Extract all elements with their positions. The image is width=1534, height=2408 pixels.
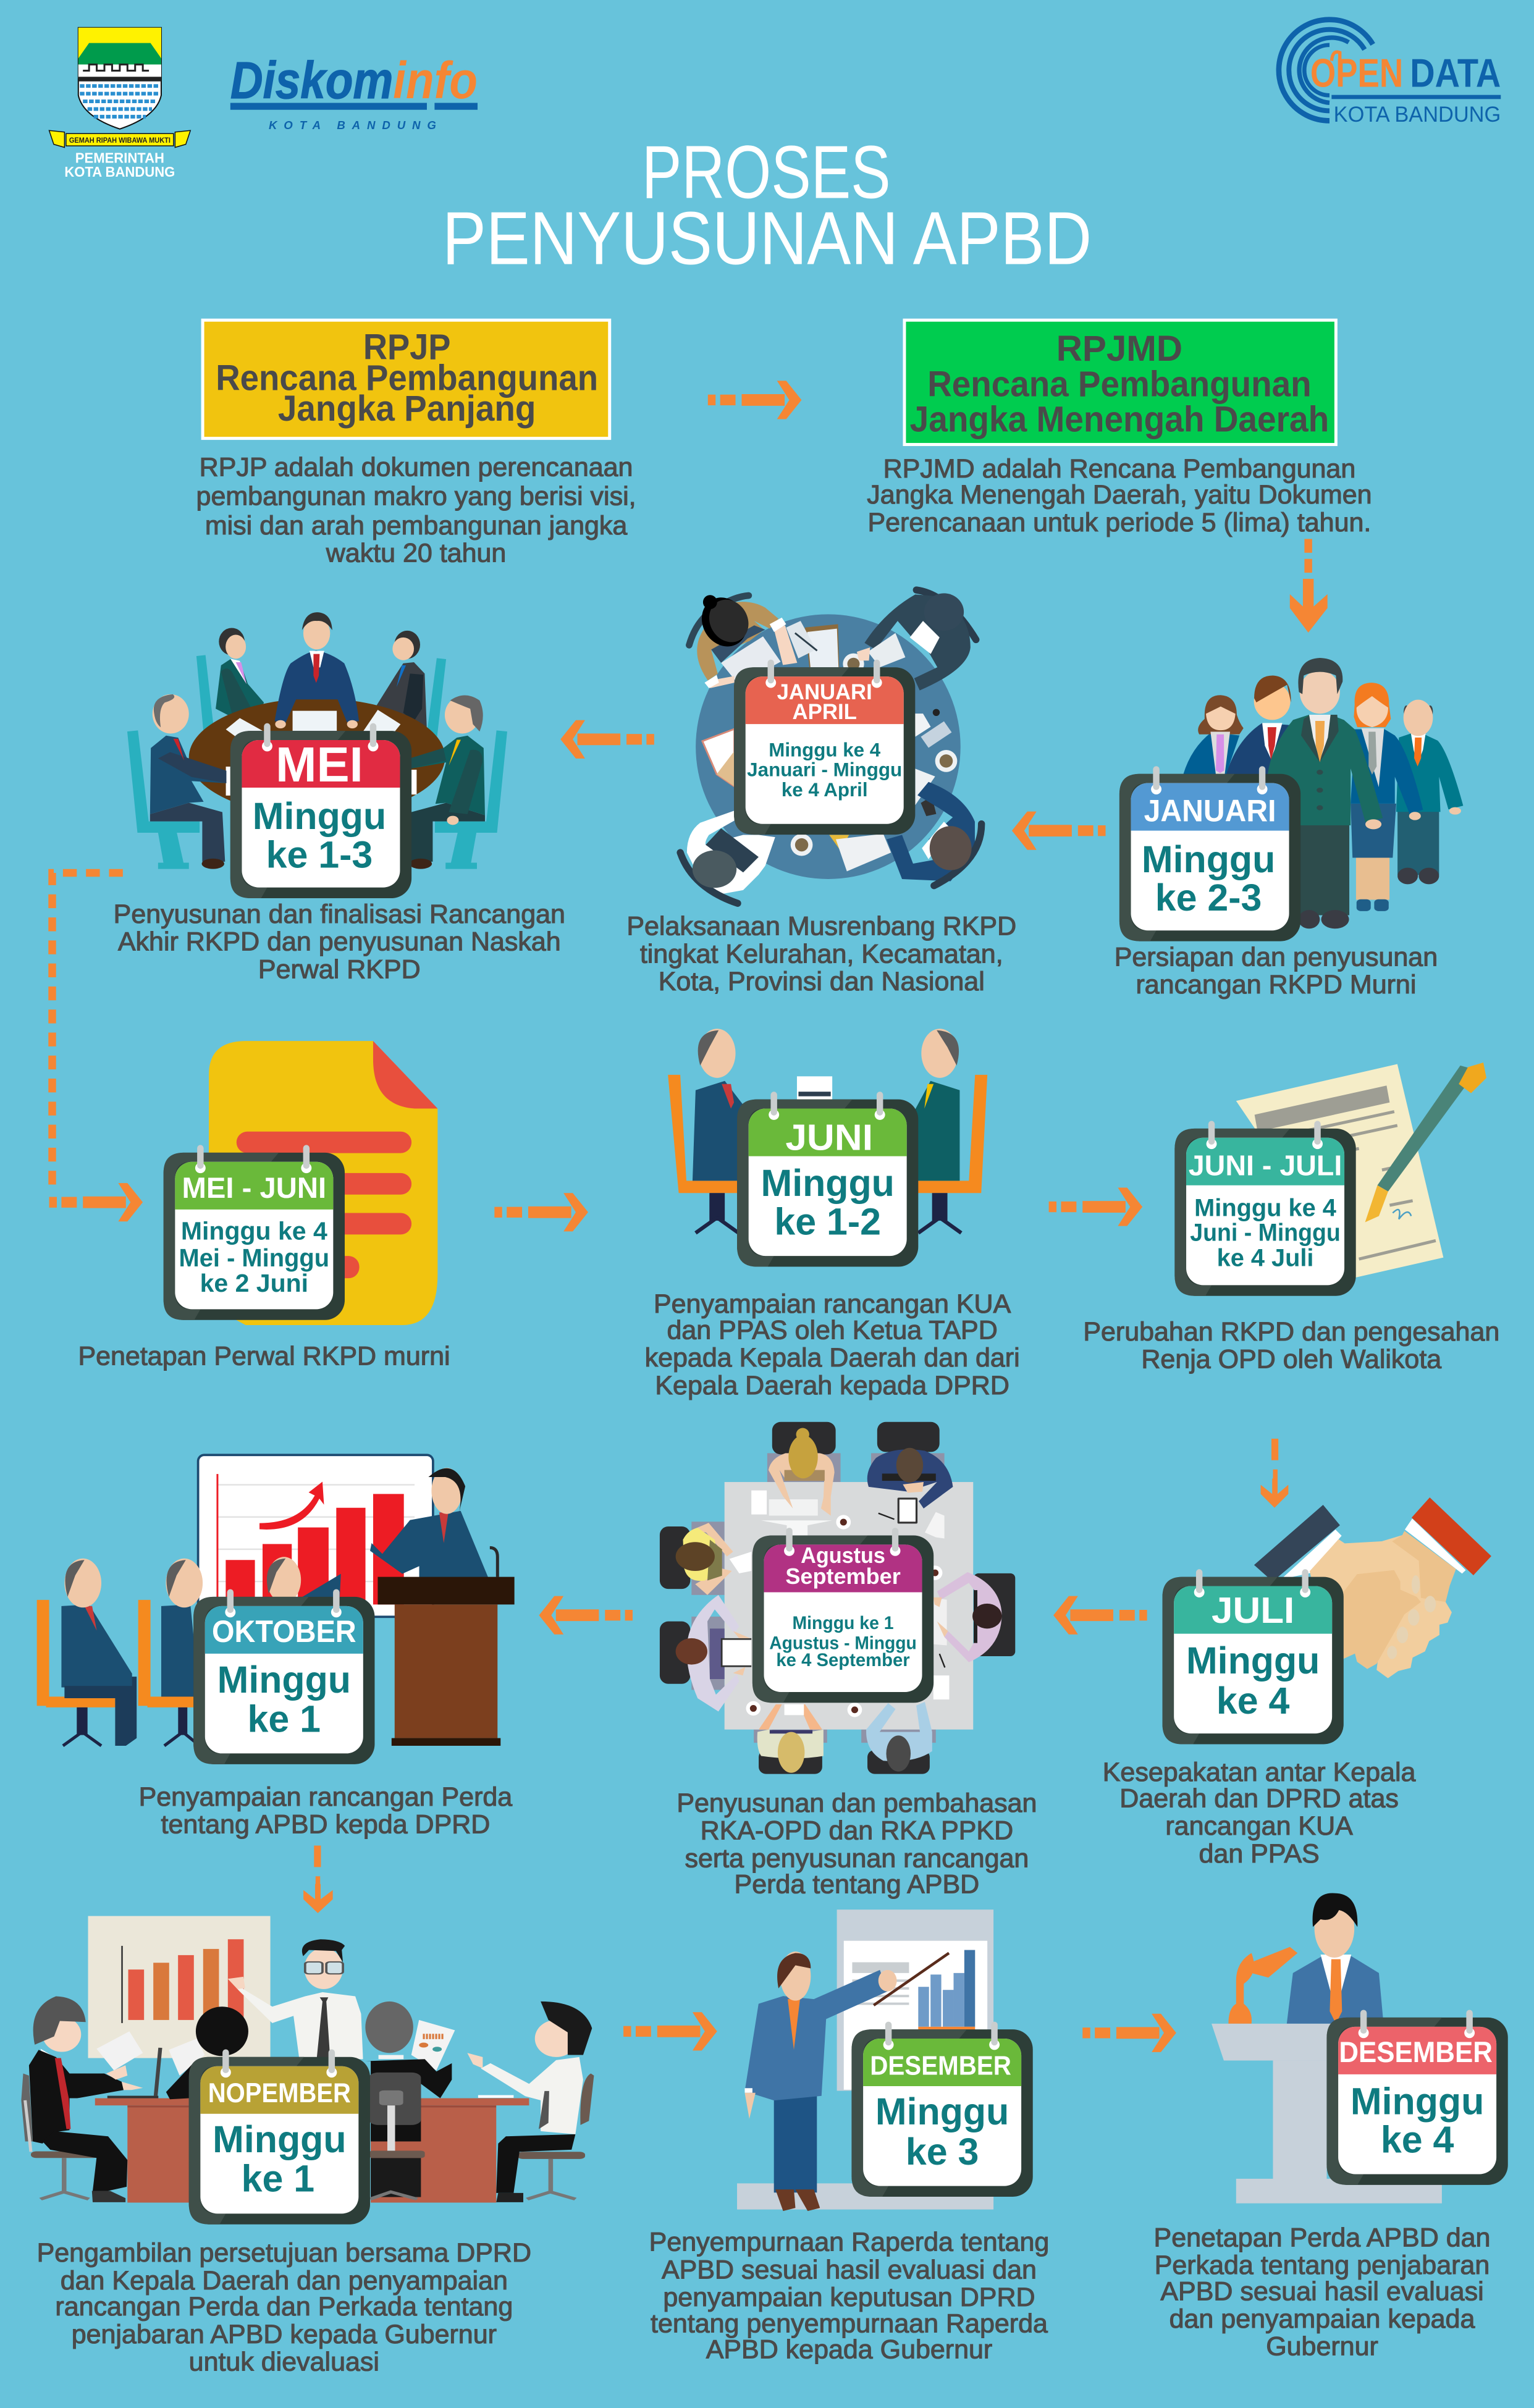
calendar: Juli: JULI: [1212, 1589, 1294, 1631]
text: Nopember description: penjabaran APBD kepada Gubernur: [72, 2320, 497, 2349]
calendar: Desember hijau: [851, 2022, 1033, 2197]
arrow: Juni to Juni-Juli: [1049, 1188, 1142, 1226]
logo: Diskominfo: info: [393, 51, 478, 109]
calendar: Juni-Juli: JUNI - JULI: [1189, 1150, 1342, 1182]
text: RPJP description: waktu 20 tahun: [326, 539, 506, 568]
text: Agustus-September description: [676, 1788, 1037, 1900]
text: RPJP description: [196, 453, 636, 568]
text: Januari-April description: Pelaksanaan Musrenbang RKPD: [626, 912, 1016, 941]
text: Mei description: Penyusunan dan finalisasi Rancangan: [114, 899, 565, 929]
text: Januari description: [1115, 942, 1438, 1000]
text: Oktober description: tentang APBD kepda DPRD: [161, 1810, 490, 1840]
text: Desember hijau description: penyampaian keputusan DPRD: [663, 2283, 1035, 2312]
text: RPJMD description: [867, 454, 1372, 537]
calendar: Januari: ke 2-3: [1155, 877, 1262, 919]
text: Juni description: Penyampaian rancangan KUA: [654, 1289, 1011, 1319]
logo: Pemerintah Kota Bandung: [49, 28, 190, 180]
calendar: Januari-April: ke 4 April: [782, 779, 868, 801]
text: Agustus-September description: serta penyusunan rancangan: [685, 1843, 1029, 1873]
panel: RPJMD: Jangka Menengah Daerah: [910, 399, 1329, 439]
calendar: Juni: Minggu: [761, 1162, 895, 1204]
text: Januari description: rancangan RKPD Murni: [1136, 970, 1416, 1000]
text: Juni description: dan PPAS oleh Ketua TAPD: [667, 1315, 998, 1345]
calendar: Januari-April: APRIL: [793, 701, 857, 724]
text: Mei description: Perwal RKPD: [258, 954, 421, 984]
panel: RPJMD: RPJMD: [1056, 329, 1182, 369]
arrow: RPJMD down to Januari: [1290, 539, 1328, 633]
calendar: Nopember: Minggu: [213, 2118, 347, 2160]
calendar: Juni: JUNI: [785, 1117, 873, 1158]
panel: RPJP: Jangka Panjang: [278, 389, 536, 429]
text: Juni-Juli description: Renja OPD oleh Walikota: [1141, 1345, 1441, 1374]
calendar: Desember merah: DESEMBER: [1339, 2036, 1493, 2069]
illustration: document: [209, 1041, 437, 1325]
arrow: Nopember to Desember: [623, 2012, 717, 2050]
text: Desember merah description: [1154, 2223, 1490, 2362]
calendar: Juli: ke 4: [1216, 1680, 1290, 1722]
calendar: Agustus-September: Agustus: [801, 1543, 885, 1568]
arrow: Juni-Juli down to Juli: [1261, 1439, 1288, 1508]
text: Nopember description: untuk dievaluasi: [189, 2347, 379, 2377]
calendar: Desember merah: [1326, 2010, 1508, 2185]
text: RPJP description: RPJP adalah dokumen perencanaan: [200, 453, 633, 482]
logo: Open Data: DATA: [1410, 50, 1501, 95]
arrow: Agustus-September to Oktober: [539, 1596, 633, 1635]
calendar: Mei-Juni: MEI - JUNI: [182, 1172, 326, 1205]
logo: Pemerintah Kota Bandung: KOTA BANDUNG: [64, 164, 175, 180]
panel: RPJP: [203, 320, 610, 439]
illustration: presenter with pointer: [737, 1909, 993, 2211]
text: Agustus-September description: Perda tentang APBD: [735, 1870, 979, 1900]
calendar: Agustus-September: [752, 1528, 933, 1703]
text: Oktober description: [139, 1782, 512, 1840]
text: Juni-Juli description: [1083, 1317, 1499, 1374]
calendar: Desember merah: ke 4: [1381, 2119, 1454, 2161]
arrow: RPJP to RPJMD: [708, 381, 801, 419]
logo: Diskominfo: KOTA BANDUNG: [269, 119, 436, 132]
illustration: two seated men: [668, 1029, 987, 1233]
calendar: Mei-Juni: Mei - Minggu: [179, 1244, 329, 1272]
calendar: Desember hijau: DESEMBER: [870, 2051, 1011, 2081]
calendar: Oktober: OKTOBER: [212, 1614, 356, 1649]
text: Desember merah description: APBD sesuai hasil evaluasi: [1160, 2276, 1484, 2306]
illustration: team of five: [1183, 658, 1463, 928]
calendar: Juni-Juli: Juni - Minggu: [1190, 1219, 1341, 1246]
calendar: Desember hijau: Minggu: [875, 2090, 1009, 2132]
calendar: Januari: Minggu: [1142, 838, 1275, 880]
calendar: Agustus-September: ke 4 September: [776, 1650, 910, 1670]
calendar: Januari-April: Minggu ke 4: [769, 739, 881, 760]
logo: Pemerintah Kota Bandung: GEMAH RIPAH WIBAWA MUKTI: [69, 136, 171, 145]
text: Juli description: Kesepakatan antar Kepala: [1103, 1758, 1416, 1787]
text: Juni-Juli description: Perubahan RKPD dan pengesahan: [1083, 1317, 1499, 1347]
calendar: Juni: [737, 1092, 918, 1267]
text: Desember merah description: Gubernur: [1266, 2332, 1378, 2362]
illustration: speaker at podium: [1212, 1893, 1442, 2204]
text: RPJP description: misi dan arah pembangunan jangka: [205, 511, 627, 541]
text: Desember merah description: dan penyampaian kepada: [1169, 2304, 1475, 2334]
text: Desember hijau description: tentang penyempurnaan Raperda: [651, 2309, 1048, 2338]
text: Nopember description: Pengambilan persetujuan bersama DPRD: [37, 2238, 531, 2268]
panel: RPJMD: [904, 320, 1336, 445]
calendar: Juni-Juli: ke 4 Juli: [1217, 1244, 1313, 1271]
calendar: Januari-April: [734, 660, 915, 835]
calendar: Juni: ke 1-2: [774, 1200, 881, 1242]
calendar: Oktober: ke 1: [248, 1698, 321, 1740]
text: Agustus-September description: RKA-OPD dan RKA PPKD: [701, 1816, 1013, 1846]
text: Nopember description: dan Kepala Daerah dan penyampaian: [61, 2266, 508, 2296]
illustration: meeting table top view: [660, 1422, 1015, 1774]
panel: RPJMD: Rencana Pembangunan: [927, 364, 1312, 404]
logo: Open Data: KOTA BANDUNG: [1334, 103, 1501, 127]
text: Juni description: Kepala Daerah kepada DPRD: [655, 1371, 1009, 1400]
arrow: Januari-April to Mei: [560, 720, 654, 759]
logo: Diskominfo: [230, 51, 478, 132]
illustration: handshake: [1254, 1497, 1491, 1678]
text: Agustus-September description: Penyusunan dan pembahasan: [676, 1788, 1037, 1818]
calendar: Oktober: Minggu: [217, 1659, 351, 1701]
logo: Diskominfo: Diskom: [230, 51, 393, 109]
text: Juni description: [645, 1289, 1020, 1400]
text: Nopember description: rancangan Perda dan Perkada tentang: [55, 2292, 513, 2322]
text: Juli description: [1103, 1758, 1416, 1869]
text: Juli description: Daerah dan DPRD atas: [1119, 1783, 1399, 1813]
text: RPJMD description: RPJMD adalah Rencana Pembangunan: [883, 454, 1355, 484]
illustration: board meeting: [127, 612, 507, 869]
logo: Open Data: OPEN: [1310, 50, 1403, 95]
title: [442, 130, 1092, 280]
text: Mei-Juni description: Penetapan Perwal RKPD murni: [78, 1342, 450, 1371]
calendar: Nopember: [189, 2049, 370, 2225]
arrow: Desember to Desember final: [1082, 2014, 1176, 2052]
text: RPJP description: pembangunan makro yang berisi visi,: [196, 482, 636, 511]
calendar: Agustus-September: September: [785, 1564, 901, 1589]
calendar: Desember hijau: ke 3: [906, 2131, 979, 2173]
text: Juli description: dan PPAS: [1199, 1839, 1320, 1869]
arrow: Mei connector to Mei-Juni: [49, 873, 143, 1221]
text: Desember hijau description: Penyempurnaan Raperda tentang: [649, 2228, 1049, 2257]
text: Nopember description: [37, 2238, 531, 2377]
text: Januari-April description: [626, 912, 1016, 996]
text: RPJMD description: Perencanaan untuk periode 5 (lima) tahun.: [867, 508, 1371, 537]
text: Januari description: Persiapan dan penyusunan: [1115, 942, 1438, 972]
illustration: signed paper and pen: [1236, 1063, 1486, 1278]
calendar: Januari-April: JANUARI: [777, 681, 872, 704]
calendar: Mei: Minggu: [253, 795, 386, 837]
calendar: Januari-April: Januari - Minggu: [747, 759, 902, 781]
calendar: Januari: [1119, 766, 1300, 941]
calendar: Mei: [230, 723, 411, 898]
text: Juni description: kepada Kepala Daerah dan dari: [645, 1343, 1020, 1373]
title: PROSES: [642, 130, 891, 214]
calendar: Desember merah: Minggu: [1351, 2081, 1484, 2123]
text: Juli description: rancangan KUA: [1165, 1811, 1353, 1841]
calendar: Nopember: NOPEMBER: [208, 2078, 351, 2108]
logo: Pemerintah Kota Bandung: PEMERINTAH: [75, 149, 164, 166]
calendar: Januari: JANUARI: [1144, 794, 1276, 828]
text: Desember hijau description: APBD sesuai hasil evaluasi dan: [662, 2255, 1037, 2284]
title: PENYUSUNAN APBD: [442, 196, 1092, 280]
text: Januari-April description: tingkat Kelurahan, Kecamatan,: [640, 939, 1003, 969]
calendar: Mei: ke 1-3: [266, 833, 373, 875]
text: Desember merah description: Perkada tentang penjabaran: [1155, 2250, 1490, 2280]
calendar: Mei-Juni: [164, 1145, 345, 1320]
text: Januari-April description: Kota, Provinsi dan Nasional: [659, 967, 985, 996]
text: Desember merah description: Penetapan Perda APBD dan: [1154, 2223, 1490, 2252]
calendar: Mei-Juni: ke 2 Juni: [200, 1269, 308, 1297]
text: RPJMD description: Jangka Menengah Daerah, yaitu Dokumen: [867, 480, 1372, 510]
text: Desember hijau description: APBD kepada Gubernur: [706, 2335, 992, 2365]
illustration: presentation to seated audience: [37, 1455, 515, 1746]
calendar: Oktober: [193, 1589, 374, 1764]
arrow: Januari to Januari-April: [1012, 812, 1106, 850]
calendar: Juli: Minggu: [1186, 1640, 1320, 1682]
arrow: Mei-Juni to Juni: [494, 1193, 588, 1231]
calendar: Juni-Juli: [1174, 1121, 1356, 1296]
logo: Open Data: [1279, 20, 1501, 127]
calendar: Nopember: ke 1: [242, 2157, 314, 2199]
calendar: Juni-Juli: Minggu ke 4: [1194, 1195, 1336, 1222]
arrow: Oktober down to Nopember: [303, 1846, 333, 1913]
panel: RPJP: Rencana Pembangunan: [216, 358, 598, 398]
text: Oktober description: Penyampaian rancangan Perda: [139, 1782, 512, 1812]
text: Mei description: [114, 899, 565, 984]
calendar: Juli: [1163, 1569, 1344, 1745]
panel: RPJP: RPJP: [363, 327, 450, 368]
calendar: Agustus-September: Minggu ke 1: [793, 1613, 894, 1633]
text: Mei description: Akhir RKPD dan penyusunan Naskah: [118, 927, 561, 957]
arrow: Juli to Agustus-September: [1053, 1596, 1147, 1635]
illustration: round table top view: [680, 589, 982, 903]
calendar: Mei: MEI: [276, 737, 363, 792]
illustration: meeting with presenter: [21, 1916, 594, 2203]
calendar: Agustus-September: Agustus - Minggu: [769, 1633, 917, 1653]
text: Desember hijau description: [649, 2228, 1049, 2365]
calendar: Mei-Juni: Minggu ke 4: [181, 1216, 327, 1245]
